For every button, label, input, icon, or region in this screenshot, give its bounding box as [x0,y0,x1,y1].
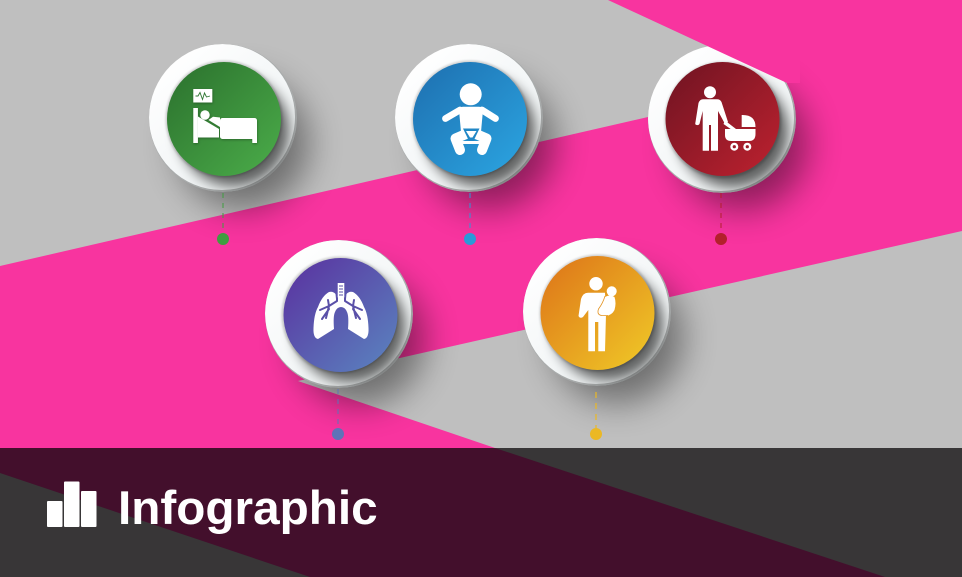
disc: green [167,62,281,176]
connector line: green [222,193,224,232]
connector line: yellow [595,392,597,428]
pink corner overlapping third ring [608,0,800,83]
ring: orange node [523,238,671,386]
disc: blue [413,62,527,176]
icon: lungs [313,283,369,339]
icon: baby in diaper [446,83,496,150]
background: gray field [0,0,962,448]
dot: red [715,233,727,245]
icon: adult pushing stroller [695,86,756,151]
connector line: purple [337,389,339,427]
icon: patient in bed with monitor [193,89,257,143]
dot: blue [464,233,476,245]
disc: purple [284,258,398,372]
ring: green node [149,44,297,192]
title: Infographic [118,482,378,535]
connector line: red [720,193,722,232]
footer: dark band [0,448,962,577]
circle shadows [177,77,808,405]
background: pink diagonal band [0,0,962,448]
icon: bar chart logo [47,482,96,527]
dot: yellow [590,428,602,440]
node: parent with stroller [648,45,796,245]
disc: orange [540,256,654,370]
ring: purple node [265,240,413,388]
ring: blue node [395,44,543,192]
node: lungs [265,240,413,440]
node: hospital bed [149,44,297,245]
disc: red [666,62,780,176]
node: adult holding child [523,238,671,440]
icon: adult carrying child [578,277,617,351]
node: baby [395,44,543,245]
dot: green [217,233,229,245]
ring: red node [648,45,796,193]
footer: maroon diagonal [0,448,885,577]
dot: purple [332,428,344,440]
connector line: blue [469,193,471,232]
